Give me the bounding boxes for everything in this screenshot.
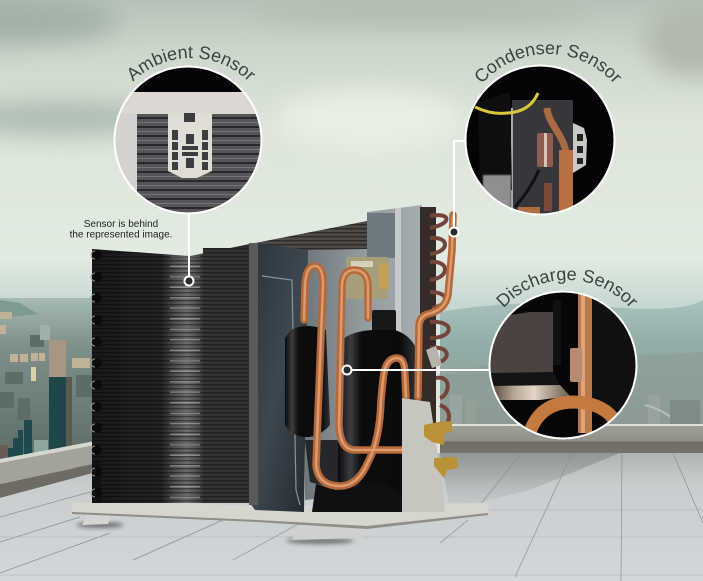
transformer [346, 257, 389, 299]
towers: small teal cluster [8, 420, 32, 459]
leader line: condenser [450, 141, 466, 236]
tiled floor [0, 453, 703, 581]
tube bends [92, 250, 102, 498]
right condenser coil with copper bends [420, 207, 449, 432]
base plate and feet [72, 502, 488, 544]
left condenser coil [91, 244, 250, 503]
tower: pale high-rise [49, 340, 66, 377]
compressor [305, 310, 416, 512]
note: sensor location: Sensor is behind [84, 219, 158, 230]
heading: Condenser Sensor: Condenser Sensor [476, 44, 622, 82]
ring: ambient [114, 66, 262, 214]
copper pipes [304, 215, 453, 486]
side steel panel [249, 243, 308, 512]
accumulator tank [285, 326, 330, 437]
rear condenser coil [250, 221, 367, 255]
air conditioner outdoor unit [72, 205, 488, 544]
callout: discharge sensor [342, 292, 636, 438]
tower: dark glass high-rise [49, 377, 72, 450]
ring: condenser [466, 66, 614, 214]
leader line: ambient [184, 213, 194, 286]
rooftop parapet wall, left [0, 441, 95, 498]
galvanized back wall [305, 205, 425, 500]
brass service valves [424, 421, 458, 478]
sky background [0, 0, 703, 320]
city and hills, right [440, 300, 703, 430]
heading: Discharge Sensor: Discharge Sensor [496, 270, 638, 308]
leader line: discharge [342, 366, 490, 374]
ring: discharge [490, 292, 636, 438]
lens: ambient sensor photo [113, 65, 263, 217]
lens: discharge sensor photo [490, 292, 636, 438]
callout: condenser sensor [450, 65, 615, 236]
lens: condenser sensor photo [465, 65, 615, 215]
note: sensor location: the represented image. [70, 230, 172, 240]
heading: Ambient Sensor: Ambient Sensor [128, 46, 256, 82]
callout: ambient sensor [113, 65, 263, 286]
city skyline, left [0, 298, 100, 468]
valve bracket [402, 398, 445, 512]
rooftop parapet wall, right [440, 424, 703, 453]
